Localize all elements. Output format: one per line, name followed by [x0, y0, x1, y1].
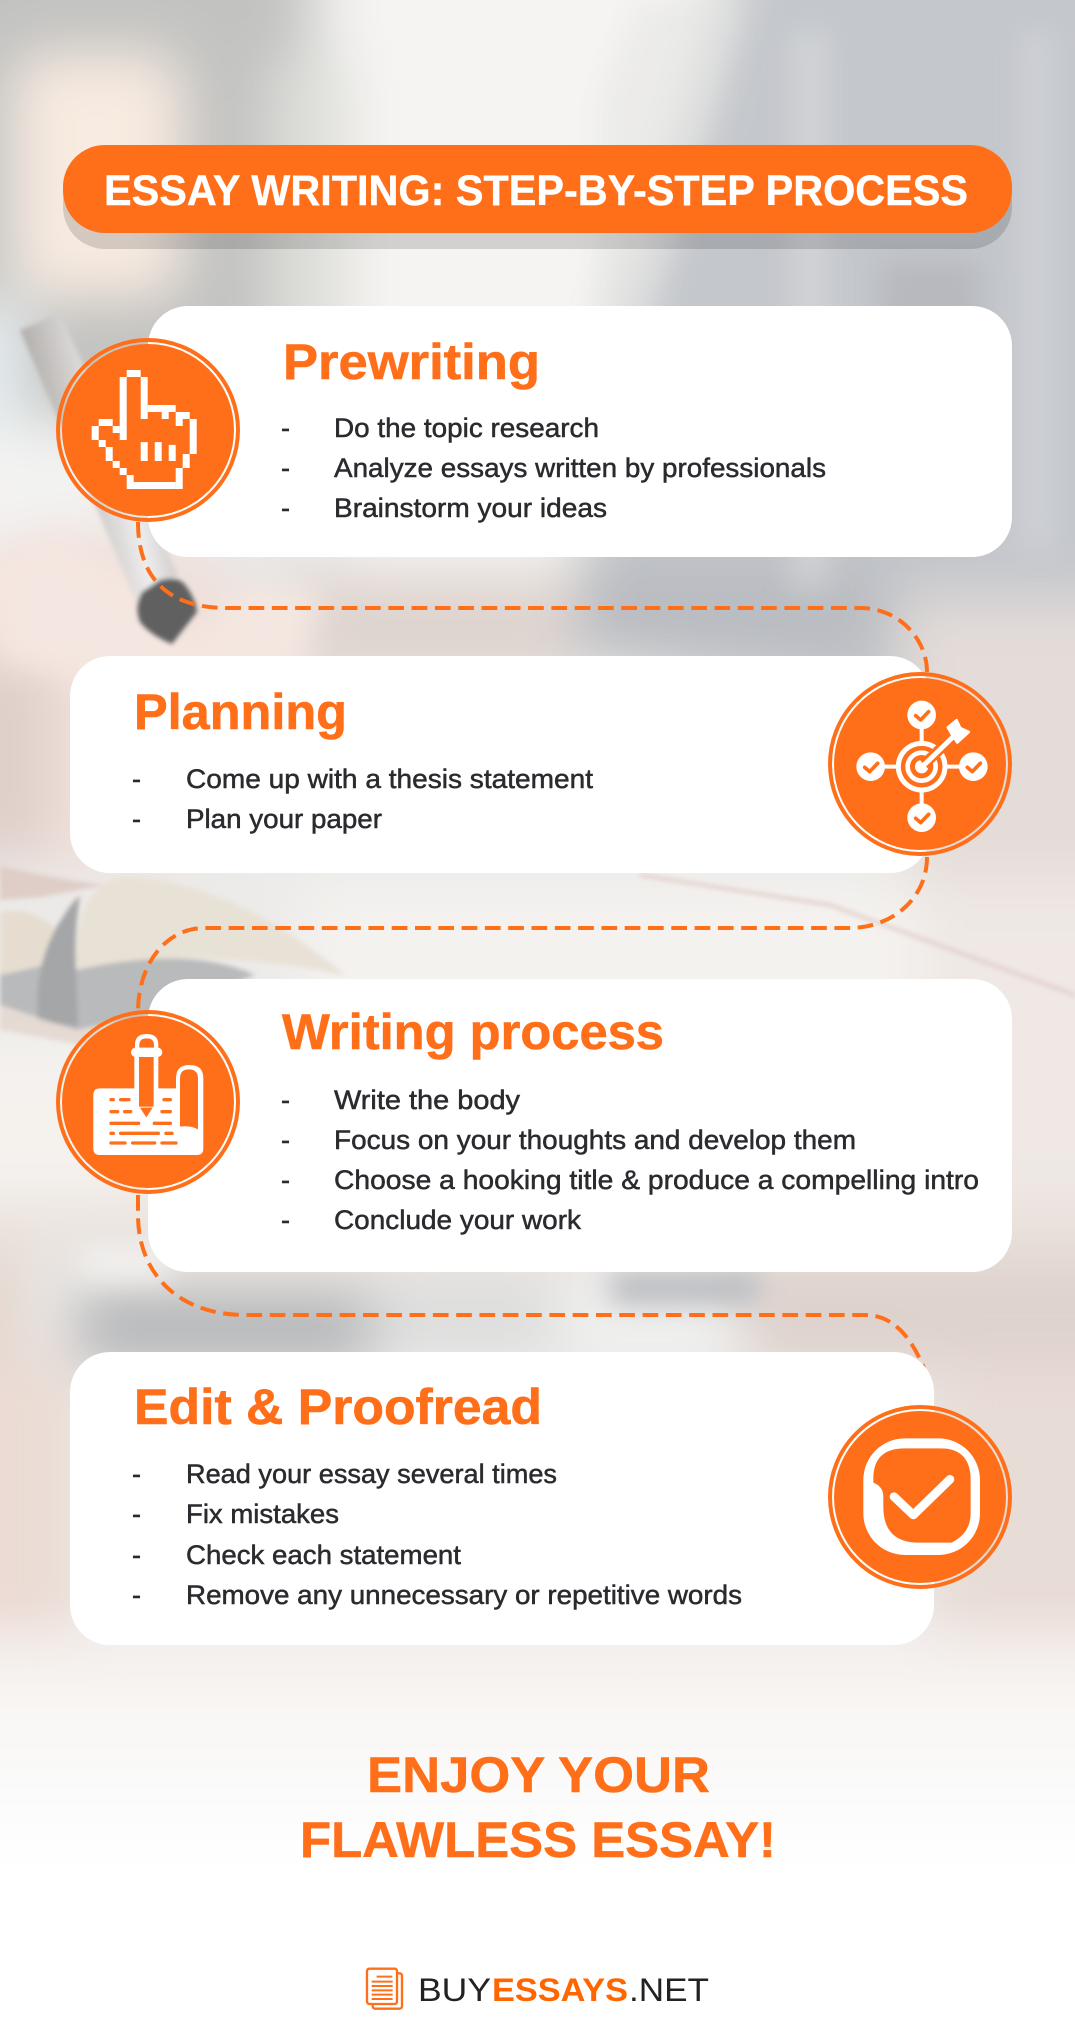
list: editing steps: Remove any unnecessary or repetitive words [186, 1580, 742, 1610]
list: writing steps: - [281, 1125, 290, 1155]
list: planning steps [132, 764, 594, 834]
list: planning steps: - [132, 764, 141, 794]
heading: edit and proofread: Edit & Proofread [134, 1379, 542, 1435]
list: prewriting steps: Analyze essays written by professionals [334, 453, 826, 483]
list: editing steps: - [132, 1580, 141, 1610]
list: editing steps: - [132, 1540, 141, 1570]
wordmark: .NET [629, 1972, 709, 2008]
heading: prewriting: Prewriting [283, 334, 540, 390]
wordmark [418, 1972, 709, 2008]
list: planning steps: - [132, 804, 141, 834]
icon: pixel pointing hand [58, 340, 238, 520]
list: editing steps: - [132, 1499, 141, 1529]
title text: ESSAY WRITING: STEP-BY-STEP PROCESS [104, 167, 968, 215]
list: editing steps: Fix mistakes [186, 1499, 339, 1529]
panel: prewriting [148, 306, 1012, 557]
dashed connector: prewriting to planning [138, 522, 927, 672]
list: writing steps: - [281, 1085, 290, 1115]
dashed connector: writing process to edit and proofread [138, 1195, 924, 1368]
heading: writing process: Writing process [282, 1004, 664, 1060]
closing message: ENJOY YOUR [367, 1747, 710, 1803]
list: writing steps: - [281, 1205, 290, 1235]
icon: rounded checkmark [830, 1407, 1010, 1587]
list: prewriting steps [281, 413, 826, 523]
list: writing steps [281, 1085, 979, 1235]
list: prewriting steps: - [281, 413, 290, 443]
wordmark: BUY [418, 1972, 491, 2008]
list: editing steps: Read your essay several times [186, 1459, 557, 1489]
title banner [63, 145, 1012, 249]
list: writing steps: Focus on your thoughts and develop them [334, 1125, 856, 1155]
closing message [300, 1747, 776, 1868]
list: writing steps: Conclude your work [334, 1205, 582, 1235]
icon: target with checkmarks [830, 674, 1010, 854]
list: writing steps: - [281, 1165, 290, 1195]
panel: edit and proofread [70, 1352, 934, 1645]
list: planning steps: Plan your paper [186, 804, 382, 834]
list: prewriting steps: - [281, 493, 290, 523]
dashed connector: planning to writing process [138, 857, 927, 1012]
list: prewriting steps: - [281, 453, 290, 483]
panel: writing process [148, 979, 1012, 1272]
panel: planning [70, 656, 930, 873]
list: writing steps: Choose a hooking title & produce a compelling intro [334, 1165, 979, 1195]
closing message: FLAWLESS ESSAY! [300, 1812, 776, 1868]
logo: buyessays.net [367, 1969, 709, 2009]
list: writing steps: Write the body [334, 1085, 521, 1115]
wordmark: ESSAYS [492, 1972, 628, 2008]
icon: pencil on scroll [58, 1012, 238, 1192]
list: editing steps: - [132, 1459, 141, 1489]
icon: stacked document [367, 1969, 402, 2009]
list: prewriting steps: Do the topic research [334, 413, 599, 443]
list: editing steps [132, 1459, 742, 1610]
heading: planning: Planning [134, 684, 347, 740]
list: planning steps: Come up with a thesis statement [186, 764, 594, 794]
list: editing steps: Check each statement [186, 1540, 461, 1570]
list: prewriting steps: Brainstorm your ideas [334, 493, 607, 523]
